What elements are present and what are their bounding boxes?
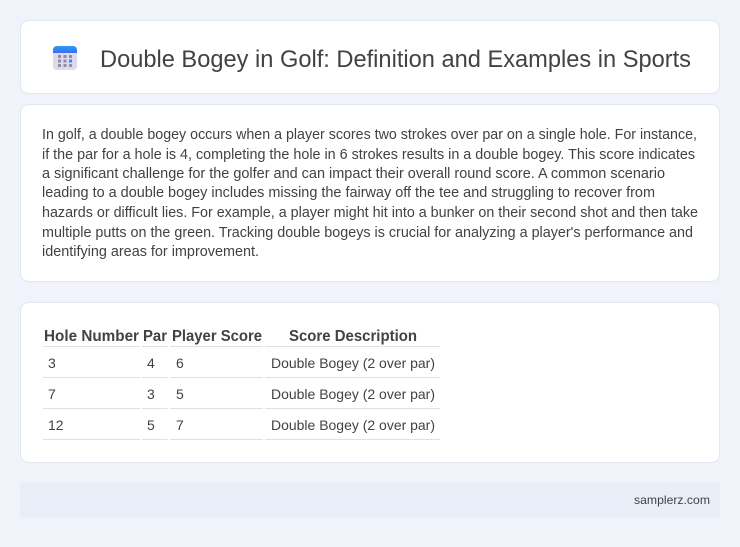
- table row: hole 7: [48, 386, 435, 402]
- panel: header: [20, 20, 720, 94]
- table row: hole 12: [48, 417, 435, 433]
- text block: description: a significant challenge for the golfer and can impact their overall round score. A common scenario: [42, 166, 665, 182]
- text block: description: if the par for a hole is 4, completing the hole in 6 strokes results in a double bogey. This score indicates: [42, 147, 695, 163]
- title: Double Bogey in Golf: Definition and Examples in Sports: [100, 46, 691, 73]
- table header: Hole Number: [44, 328, 139, 345]
- table header: Player Score: [172, 328, 262, 345]
- table row: hole 3: Double Bogey (2 over par): [271, 355, 435, 371]
- footer: [20, 483, 720, 517]
- text block: description: In golf, a double bogey occurs when a player scores two strokes over par on a single hole. For instance,: [42, 127, 697, 143]
- table row: hole 3: [48, 355, 435, 371]
- table row: hole 7: 7: [48, 386, 56, 402]
- text block: description: leading to a double bogey includes missing the fairway off the tee and struggling to recover from: [42, 185, 655, 201]
- table row: hole 3: 6: [176, 355, 184, 371]
- table row: hole 3: 3: [48, 355, 56, 371]
- table row: hole 12: 5: [147, 417, 155, 433]
- table row: hole 7: Double Bogey (2 over par): [271, 386, 435, 402]
- icon: calendar: [53, 46, 77, 70]
- table header: [44, 328, 417, 345]
- table rules: [43, 346, 440, 440]
- text block: description: [42, 127, 698, 260]
- table row: hole 12: Double Bogey (2 over par): [271, 417, 435, 433]
- table header: Par: [143, 328, 167, 345]
- table row: hole 7: 3: [147, 386, 155, 402]
- table row: hole 12: 12: [48, 417, 64, 433]
- table row: hole 3: 4: [147, 355, 155, 371]
- panel: description: [20, 104, 720, 282]
- text block: description: hazards or difficult lies. For example, a player might hit into a bunker on their second shot and then take: [42, 205, 698, 221]
- table header: Score Description: [289, 328, 417, 345]
- footer text: samplerz.com: [634, 493, 710, 507]
- text block: description: multiple putts on the green. Tracking double bogeys is crucial for analyzing a player's performance and: [42, 225, 693, 241]
- text block: description: identifying areas for improvement.: [42, 244, 259, 260]
- table row: hole 7: 5: [176, 386, 184, 402]
- table row: hole 12: 7: [176, 417, 184, 433]
- panel: table: [20, 302, 720, 462]
